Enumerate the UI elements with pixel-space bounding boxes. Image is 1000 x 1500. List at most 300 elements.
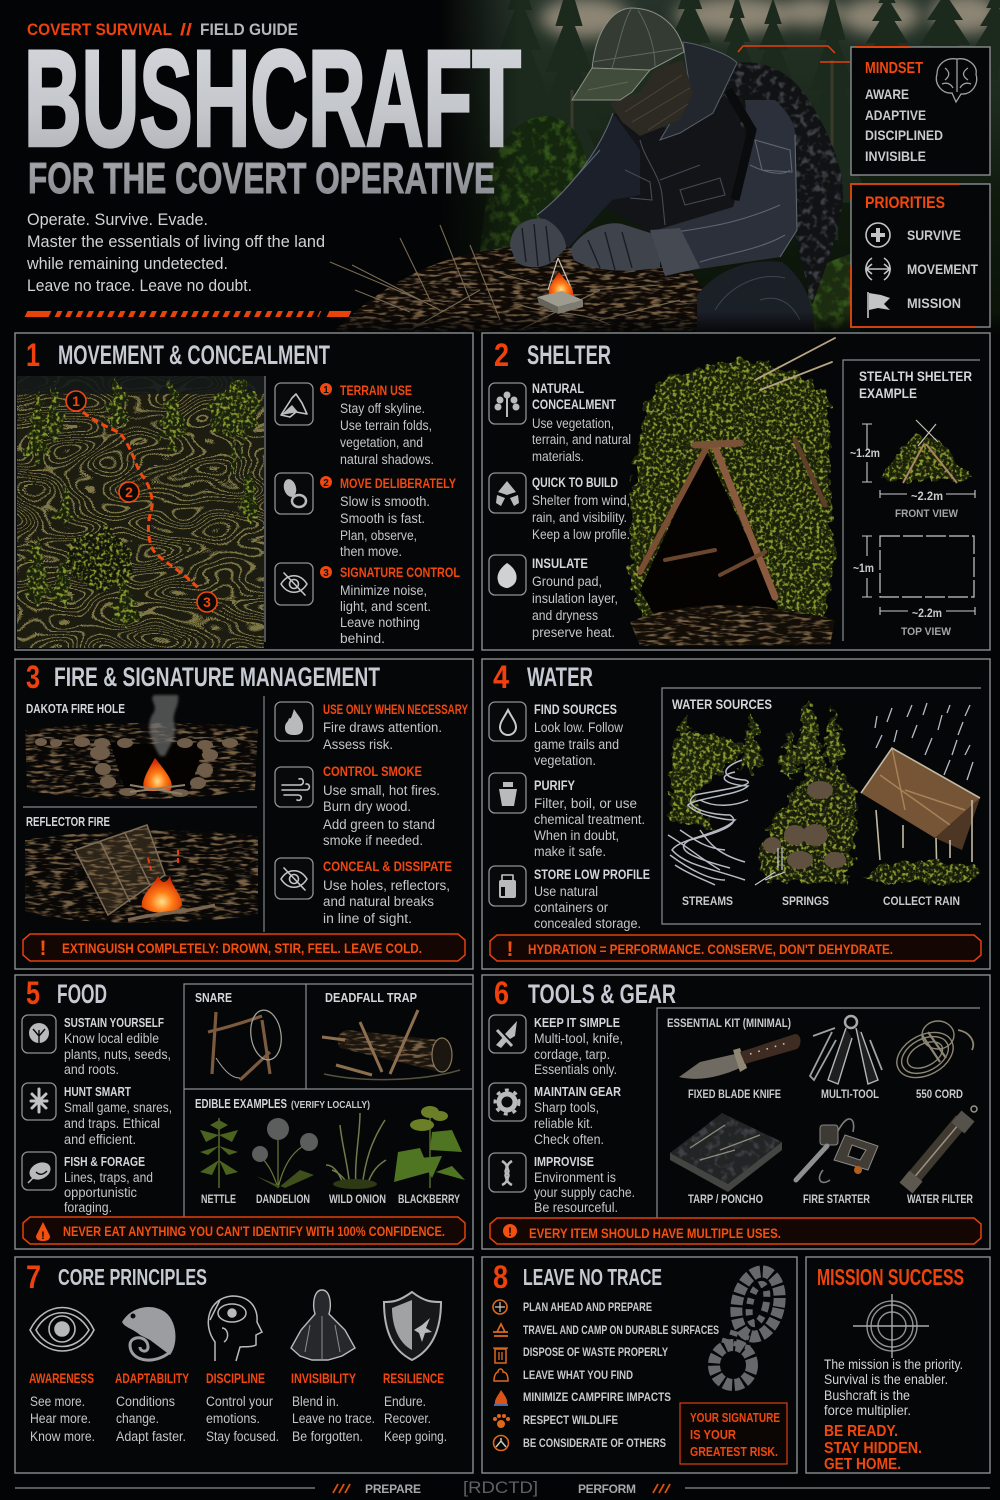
header kicker: FIELD GUIDE (200, 20, 298, 39)
top view diagram: ~1m (853, 561, 874, 575)
row: waste: DISPOSE OF WASTE PROPERLY (523, 1345, 668, 1359)
text: fish and forage: foraging. (64, 1200, 112, 1215)
text: quick to build: Keep a low profile. (532, 527, 630, 542)
row: plan ahead: PLAN AHEAD AND PREPARE (523, 1300, 652, 1314)
principle: invisibility: INVISIBILITY (291, 1371, 356, 1386)
text: sustain yourself: and roots. (64, 1062, 119, 1077)
text: improvise: IMPROVISE (534, 1154, 594, 1169)
icon: boot print (714, 1267, 785, 1385)
near arm sleeve (537, 113, 640, 248)
panel 6: tools and gear (482, 975, 990, 1249)
text: fish and forage: FISH & FORAGE (64, 1154, 145, 1169)
text: fish and forage (64, 1154, 153, 1215)
row: others: BE CONSIDERATE OF OTHERS (523, 1436, 666, 1450)
text: store low profile: STORE LOW PROFILE (534, 867, 650, 882)
footer (15, 1478, 990, 1497)
intro text: Master the essentials of living off the land (27, 232, 325, 251)
text: use only when necessary: Assess risk. (323, 737, 393, 752)
text: maintain gear: MAINTAIN GEAR (534, 1084, 622, 1099)
inset: water sources: COLLECT RAIN (883, 894, 960, 908)
principle: awareness (29, 1371, 95, 1444)
gear: 550 cord: 550 CORD (916, 1087, 963, 1101)
inset: water sources (662, 688, 981, 924)
inset: water sources: STREAMS (682, 894, 733, 908)
icon: leaf (22, 1015, 56, 1053)
icon: brain (936, 59, 977, 102)
text: conceal and dissipate (323, 859, 452, 926)
icon: storage container (489, 866, 526, 906)
inset: essential kit (657, 1008, 980, 1218)
icon: rope (489, 1153, 526, 1192)
text: keep it simple: cordage, tarp. (534, 1047, 610, 1062)
mission text: The mission is the priority. (824, 1357, 963, 1372)
mission call to action (824, 1423, 922, 1473)
backpack (720, 62, 843, 305)
text: improvise: Environment is (534, 1170, 616, 1185)
text: quick to build: QUICK TO BUILD (532, 475, 618, 490)
text: move deliberately: Plan, observe, (340, 528, 417, 543)
text: keep it simple: Multi-tool, knife, (534, 1031, 623, 1046)
text: use only when necessary (323, 702, 468, 752)
principle: awareness: AWARENESS (29, 1371, 94, 1386)
gear: fire starter: FIRE STARTER (803, 1192, 870, 1206)
text: control smoke: CONTROL SMOKE (323, 764, 422, 779)
text: maintain gear: Check often. (534, 1132, 604, 1147)
header kicker: // (180, 20, 192, 39)
icon: tree (489, 383, 526, 424)
title: BUSHCRAFT (24, 22, 521, 176)
text: signature control: behind. (340, 631, 385, 646)
principle: awareness: Know more. (30, 1429, 95, 1444)
callout: extinguish: EXTINGUISH COMPLETELY: DROWN, STIR, FEEL. LEAVE COLD. (62, 940, 422, 956)
gear: multi-tool (810, 1016, 882, 1101)
intro text (26, 210, 325, 295)
gear: multi-tool: MULTI-TOOL (821, 1087, 879, 1101)
principle: awareness: See more. (30, 1394, 85, 1409)
inset: stealth shelter example (843, 360, 980, 641)
row: others (494, 1436, 666, 1450)
small fire on a tinder block (548, 258, 572, 290)
text: natural concealment: terrain, and natural (532, 432, 631, 447)
plant: dandelion (252, 1118, 318, 1206)
text: hunt smart: and efficient. (64, 1132, 136, 1147)
text: sustain yourself: plants, nuts, seeds, (64, 1047, 171, 1062)
collar (660, 42, 737, 140)
panel 8: leave no trace: LEAVE NO TRACE (523, 1264, 662, 1290)
plant: nettle (200, 1118, 238, 1206)
text: conceal and dissipate: and natural breaks (323, 894, 434, 909)
illustration: deadfall trap: DEADFALL TRAP (325, 990, 417, 1005)
text: improvise (534, 1154, 635, 1215)
icon: fish (22, 1152, 56, 1190)
gear: water filter: WATER FILTER (907, 1192, 973, 1206)
icon: reticle (853, 1294, 929, 1358)
callout: edible confidence: NEVER EAT ANYTHING YOU CAN'T IDENTIFY WITH 100% CONFIDENCE. (63, 1223, 445, 1239)
illustration: dakota fire hole (25, 695, 258, 799)
gear: fire starter (796, 1119, 878, 1206)
callout: extinguish (23, 934, 465, 961)
text: keep it simple: Essentials only. (534, 1062, 617, 1077)
illustration: snare: SNARE (195, 990, 232, 1005)
mindset list: DISCIPLINED (865, 127, 943, 143)
callout: edible confidence: ! (41, 1230, 45, 1242)
cap (592, 8, 684, 70)
icon: water purifier (489, 773, 526, 813)
mission call to action: STAY HIDDEN. (824, 1440, 922, 1457)
text: natural concealment: NATURAL (532, 381, 584, 396)
text: keep it simple (534, 1015, 623, 1077)
panel: priorities: SURVIVE (907, 227, 961, 243)
header kicker (27, 20, 298, 39)
panel 7: core principles (15, 1257, 473, 1473)
text: natural concealment (532, 381, 631, 464)
icon: leaf (489, 555, 526, 595)
principle: adaptability: Adapt faster. (116, 1429, 186, 1444)
text: use only when necessary: Fire draws attention. (323, 720, 442, 735)
text: move deliberately (320, 476, 456, 559)
footer: PERFORM (578, 1482, 636, 1496)
text: move deliberately: Smooth is fast. (340, 511, 425, 526)
principle: invisibility: Blend in. (292, 1394, 339, 1409)
panel: priorities (851, 184, 990, 327)
callout: hydration: ! (506, 938, 514, 961)
panel: mindset (851, 47, 990, 175)
text: move deliberately: 2 (323, 478, 329, 489)
jacket seams (537, 113, 797, 262)
principle: invisibility: Be forgotten. (292, 1429, 363, 1444)
header kicker: COVERT SURVIVAL (27, 20, 172, 39)
text: move deliberately: then move. (340, 544, 402, 559)
plant: wild onion (326, 1113, 386, 1206)
plant: nettle: NETTLE (201, 1192, 236, 1206)
panel: priorities: MOVEMENT (907, 261, 978, 277)
icon: cloak (291, 1290, 355, 1360)
front view diagram: ~1.2m (850, 446, 880, 460)
callout: multiple uses (490, 1218, 981, 1244)
text: store low profile: containers or (534, 900, 608, 915)
text: quick to build: rain, and visibility. (532, 510, 627, 525)
panel 8: leave no trace (482, 1257, 797, 1473)
panel 6: tools and gear: 6 (494, 975, 509, 1011)
text: purify: PURIFY (534, 778, 575, 793)
plant: blackberry (394, 1106, 465, 1206)
icon: animal track (22, 1083, 56, 1120)
intro text: while remaining undetected. (26, 254, 228, 273)
principle: invisibility: Leave no trace. (292, 1411, 375, 1426)
hud accent lines (738, 46, 850, 62)
panel 5: food: FOOD (57, 979, 107, 1009)
icon: wind (275, 767, 313, 807)
principle: adaptability: Conditions (116, 1394, 175, 1409)
row: durable surfaces: TRAVEL AND CAMP ON DURABLE SURFACES (523, 1323, 719, 1337)
text: terrain use (320, 383, 434, 467)
mask (610, 60, 693, 136)
row: plan ahead (493, 1300, 652, 1314)
route (83, 412, 200, 590)
text: quick to build (532, 475, 630, 542)
row: campfire (494, 1390, 671, 1405)
text: improvise: Be resourceful. (534, 1200, 618, 1215)
text: move deliberately: Slow is smooth. (340, 494, 430, 509)
text: store low profile (534, 867, 650, 931)
callout: hydration (490, 935, 981, 961)
illustration: deadfall trap (322, 990, 460, 1080)
principle: resilience: Endure. (384, 1394, 426, 1409)
icon: gear (489, 1083, 526, 1121)
text: purify (534, 778, 645, 859)
illustration: snare (195, 990, 284, 1080)
principle: resilience (383, 1371, 447, 1444)
mindset list: ADAPTIVE (865, 107, 926, 123)
mission text: Bushcraft is the (824, 1388, 910, 1403)
panel: mission success (806, 1257, 990, 1473)
gear: 550 cord (889, 1021, 973, 1101)
mission text: Survival is the enabler. (824, 1372, 948, 1387)
illustration: reflector fire (25, 825, 258, 923)
intro text: Leave no trace. Leave no doubt. (27, 276, 252, 295)
icon: hidden eye (275, 563, 313, 605)
row: wildlife (493, 1413, 618, 1428)
gear: knife (679, 1034, 801, 1101)
legs (697, 261, 814, 332)
callout: signature risk: GREATEST RISK. (690, 1444, 778, 1459)
row: leave what you find (494, 1368, 633, 1382)
intro text: Operate. Survive. Evade. (27, 210, 208, 229)
text: natural concealment: materials. (532, 449, 584, 464)
text: terrain use: natural shadows. (340, 452, 434, 467)
callout: signature risk (680, 1403, 787, 1464)
hands (510, 219, 566, 267)
text: signature control: light, and scent. (340, 599, 431, 614)
plant: wild onion: WILD ONION (329, 1192, 386, 1206)
callout: extinguish: ! (40, 937, 46, 960)
mission text (824, 1357, 963, 1418)
leave no trace list (493, 1300, 719, 1450)
plant: blackberry: BLACKBERRY (398, 1192, 460, 1206)
mindset list (865, 86, 943, 164)
text: find sources: game trails and (534, 737, 619, 752)
text: conceal and dissipate: Use holes, reflectors, (323, 878, 450, 893)
callout: multiple uses: ! (508, 1225, 512, 1239)
text: signature control: SIGNATURE CONTROL (340, 565, 460, 580)
illustration: rain tarp (861, 703, 980, 884)
text: conceal and dissipate: CONCEAL & DISSIPATE (323, 859, 452, 874)
heading: edible examples: (VERIFY LOCALLY) (291, 1099, 370, 1111)
text: sustain yourself: SUSTAIN YOURSELF (64, 1015, 164, 1030)
icon: eye (30, 1308, 94, 1351)
principle: awareness: Hear more. (30, 1411, 91, 1426)
text: find sources: vegetation. (534, 753, 596, 768)
callout: multiple uses: EVERY ITEM SHOULD HAVE MULTIPLE USES. (529, 1225, 781, 1241)
terrain map (17, 376, 264, 648)
panel 1: movement and concealment: MOVEMENT & CONCEALMENT (58, 340, 330, 370)
inset: essential kit: ESSENTIAL KIT (MINIMAL) (667, 1016, 791, 1030)
inset: water sources: SPRINGS (782, 894, 829, 908)
text: insulate: preserve heat. (532, 625, 615, 640)
icon: crossed knife (489, 1015, 526, 1053)
text: find sources: Look low. Follow (534, 720, 623, 735)
row: leave what you find: LEAVE WHAT YOU FIND (523, 1368, 633, 1382)
principle: discipline: emotions. (206, 1411, 260, 1426)
text: natural concealment: Use vegetation, (532, 416, 614, 431)
icon: hidden eye (275, 858, 313, 899)
text: purify: Filter, boil, or use (534, 796, 637, 811)
front view diagram (850, 420, 975, 520)
text: find sources: FIND SOURCES (534, 702, 617, 717)
gear: tarp: TARP / PONCHO (688, 1192, 763, 1206)
mindset list: INVISIBLE (865, 148, 926, 164)
plant: dandelion: DANDELION (256, 1192, 310, 1206)
mission call to action: BE READY. (824, 1423, 898, 1440)
text: fish and forage: opportunistic (64, 1185, 137, 1200)
illustration: lean-to shelter (630, 338, 835, 646)
terrain map: 1 (72, 393, 80, 409)
gear: knife: FIXED BLADE KNIFE (688, 1087, 781, 1101)
principle: adaptability (115, 1371, 189, 1444)
text: maintain gear (534, 1084, 622, 1147)
text: signature control: Leave nothing (340, 615, 420, 630)
mission call to action: GET HOME. (824, 1456, 901, 1473)
panel 5: food (15, 975, 473, 1249)
illustration: stream (668, 715, 766, 885)
text: use only when necessary: USE ONLY WHEN NECESSARY (323, 702, 468, 717)
text: find sources (534, 702, 623, 768)
principle: discipline: DISCIPLINE (206, 1371, 265, 1386)
text: insulate: Ground pad, (532, 574, 602, 589)
panel 2: shelter: SHELTER (527, 340, 611, 370)
text: control smoke: Add green to stand (323, 817, 435, 832)
orange hazard dash bar (26, 311, 350, 317)
far arm sleeve (650, 100, 797, 272)
top view diagram (853, 536, 975, 638)
panel 3: fire and signature management: FIRE & SIGNATURE MANAGEMENT (54, 662, 380, 692)
text: quick to build: Shelter from wind, (532, 493, 630, 508)
mission text: force multiplier. (824, 1403, 911, 1418)
gear: water filter (906, 1106, 977, 1206)
panel 5: food: 5 (26, 975, 40, 1011)
text: improvise: your supply cache. (534, 1185, 635, 1200)
principle: adaptability: ADAPTABILITY (115, 1371, 189, 1386)
row: campfire: MINIMIZE CAMPFIRE IMPACTS (523, 1390, 671, 1404)
footer: [RDCTD] (463, 1478, 538, 1497)
principle: resilience: Recover. (384, 1411, 431, 1426)
panel 2: shelter: 2 (494, 337, 509, 373)
panel 4: water: WATER (527, 662, 593, 692)
text: store low profile: concealed storage. (534, 916, 641, 931)
text: insulate (532, 556, 618, 640)
callout: hydration: HYDRATION = PERFORMANCE. CONSERVE, DON'T DEHYDRATE. (528, 941, 893, 957)
top view diagram: TOP VIEW (901, 626, 952, 638)
icon: flag (868, 292, 890, 318)
panel 2: shelter (482, 333, 990, 650)
principle: discipline: Control your (206, 1394, 273, 1409)
text: purify: When in doubt, (534, 828, 619, 843)
principle: discipline: Stay focused. (206, 1429, 279, 1444)
callout: edible confidence (23, 1217, 465, 1244)
panel 3: fire and signature management: 3 (26, 659, 40, 695)
icon: survive (866, 223, 890, 247)
icon: water drop (489, 702, 526, 741)
panel 3: fire and signature management: REFLECTOR FIRE (26, 814, 110, 829)
top view diagram: ~2.2m (912, 606, 942, 620)
principle: discipline (206, 1371, 279, 1444)
panel 4: water: 4 (493, 659, 509, 695)
panel 1: movement and concealment: 1 (26, 337, 40, 373)
text: purify: make it safe. (534, 844, 606, 859)
text: maintain gear: Sharp tools, (534, 1100, 599, 1115)
text: terrain use: 1 (323, 385, 329, 396)
text: terrain use: TERRAIN USE (340, 383, 412, 398)
panel 4: water (482, 659, 990, 969)
principle: adaptability: change. (116, 1411, 159, 1426)
icon: mountain (275, 383, 313, 425)
text: hunt smart: HUNT SMART (64, 1084, 131, 1099)
principle: invisibility (291, 1371, 375, 1444)
text: hunt smart: Small game, snares, (64, 1100, 172, 1115)
torso (600, 95, 780, 240)
text: terrain use: vegetation, and (340, 435, 423, 450)
text: insulate: INSULATE (532, 556, 588, 571)
icon: movement (866, 258, 890, 280)
text: insulate: and dryness (532, 608, 598, 623)
front view diagram: FRONT VIEW (895, 508, 959, 520)
inset: stealth shelter example: STEALTH SHELTER (859, 369, 972, 384)
text: control smoke: Burn dry wood. (323, 799, 411, 814)
panel 6: tools and gear: TOOLS & GEAR (528, 979, 676, 1009)
text: sustain yourself (64, 1015, 171, 1077)
panel 7: core principles: 7 (26, 1259, 41, 1295)
text: signature control: 3 (323, 568, 329, 579)
footer: PREPARE (365, 1482, 421, 1496)
text: sustain yourself: Know local edible (64, 1031, 159, 1046)
icon: flame (275, 702, 313, 741)
text: terrain use: Stay off skyline. (340, 401, 425, 416)
principle: resilience: RESILIENCE (383, 1371, 444, 1386)
subtitle: FOR THE COVERT OPERATIVE (28, 154, 495, 203)
text: insulate: insulation layer, (532, 591, 618, 606)
text: move deliberately: MOVE DELIBERATELY (340, 476, 456, 491)
panel 1: movement and concealment (15, 333, 473, 650)
front view diagram: ~2.2m (911, 489, 943, 503)
text: purify: chemical treatment. (534, 812, 645, 827)
mindset list: AWARE (865, 86, 909, 102)
text: signature control: Minimize noise, (340, 583, 427, 598)
inset: stealth shelter example: EXAMPLE (859, 386, 917, 401)
text: control smoke: Use small, hot fires. (323, 783, 440, 798)
twig floor (330, 246, 735, 335)
text: maintain gear: reliable kit. (534, 1116, 593, 1131)
row: durable surfaces (493, 1323, 719, 1337)
row: waste (493, 1345, 668, 1363)
panel 3: fire and signature management (15, 659, 473, 969)
inset: water sources: WATER SOURCES (672, 697, 772, 712)
text: fish and forage: Lines, traps, and (64, 1170, 153, 1185)
panel: mindset: MINDSET (865, 60, 923, 77)
panel 3: fire and signature management: DAKOTA FIRE HOLE (26, 701, 125, 716)
icon: chameleon (122, 1307, 175, 1360)
text: control smoke (323, 764, 440, 848)
text: store low profile: Use natural (534, 884, 598, 899)
hero illustration: operative lighting a fire in the forest (0, 0, 1000, 335)
text: control smoke: smoke if needed. (323, 833, 423, 848)
text: keep it simple: KEEP IT SIMPLE (534, 1015, 620, 1030)
icon: footprints (275, 473, 313, 514)
callout: signature risk: YOUR SIGNATURE (690, 1410, 780, 1425)
icon: quick build (489, 473, 526, 513)
panel 8: leave no trace: 8 (493, 1259, 508, 1295)
text: hunt smart (64, 1084, 172, 1147)
callout: signature risk: IS YOUR (690, 1427, 737, 1442)
